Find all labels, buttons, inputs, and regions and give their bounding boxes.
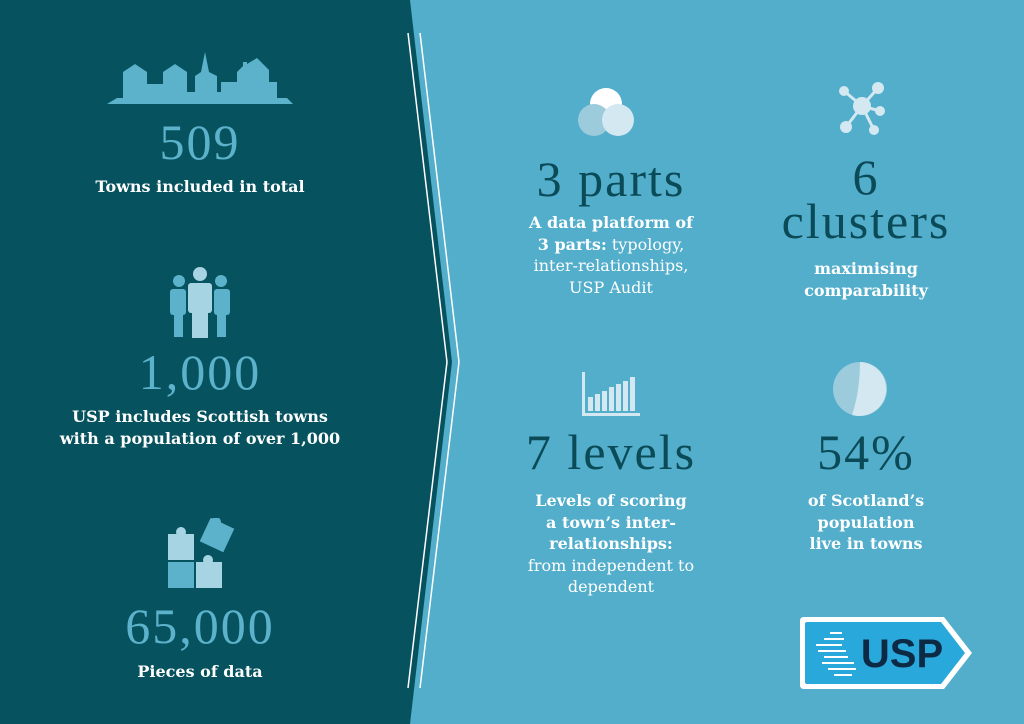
stat: 509: 509 xyxy=(160,114,240,170)
icon: bar chart xyxy=(582,372,640,416)
label: levels: relationships: xyxy=(549,534,673,553)
label: population: with a population of over 1,000 xyxy=(60,428,340,448)
logo: USP xyxy=(800,617,972,689)
label: 3 parts xyxy=(528,213,694,296)
icon: pie chart xyxy=(833,362,887,416)
label: clusters: comparability xyxy=(804,280,928,300)
stat: 6 clusters: 6 xyxy=(852,149,880,205)
label: 3 parts: inter-relationships, xyxy=(534,256,688,275)
stat: 1,000: 1,000 xyxy=(139,344,261,400)
label: 3 parts: 3 parts: typology, xyxy=(538,234,684,254)
label: population share: live in towns xyxy=(810,534,922,553)
label: population xyxy=(60,407,340,448)
label: levels xyxy=(528,491,694,596)
stat: 65,000: 65,000 xyxy=(125,598,275,654)
stat: 3 parts: 3 parts xyxy=(537,151,685,207)
label: clusters: maximising xyxy=(814,259,918,278)
label: towns: Towns included in total xyxy=(95,177,305,196)
label: pieces: Pieces of data xyxy=(137,662,263,681)
label: population share: population xyxy=(818,512,914,532)
icon: people xyxy=(170,267,230,338)
label: levels: Levels of scoring xyxy=(535,491,687,510)
stat: 54%: 54% xyxy=(817,424,915,480)
label: population share xyxy=(808,491,924,553)
label: 3 parts: A data platform of xyxy=(529,213,693,232)
icon: town skyline xyxy=(107,52,293,104)
icon: network xyxy=(839,82,885,135)
label: levels: from independent to xyxy=(528,556,694,574)
label: levels: dependent xyxy=(568,577,654,596)
stat: 6 clusters xyxy=(782,149,950,249)
label: 3 parts: USP Audit xyxy=(569,278,653,296)
label: clusters xyxy=(804,259,928,300)
label: population: USP includes Scottish towns xyxy=(72,407,328,426)
stat: 7 levels: 7 levels xyxy=(526,424,696,480)
logo: USP: USP xyxy=(861,632,943,676)
icon: three circles xyxy=(578,88,634,136)
icon: puzzle xyxy=(168,518,234,588)
label: levels: a town’s inter- xyxy=(546,512,676,532)
label: population share: of Scotland’s xyxy=(808,491,924,510)
stat: 6 clusters: clusters xyxy=(782,193,950,249)
